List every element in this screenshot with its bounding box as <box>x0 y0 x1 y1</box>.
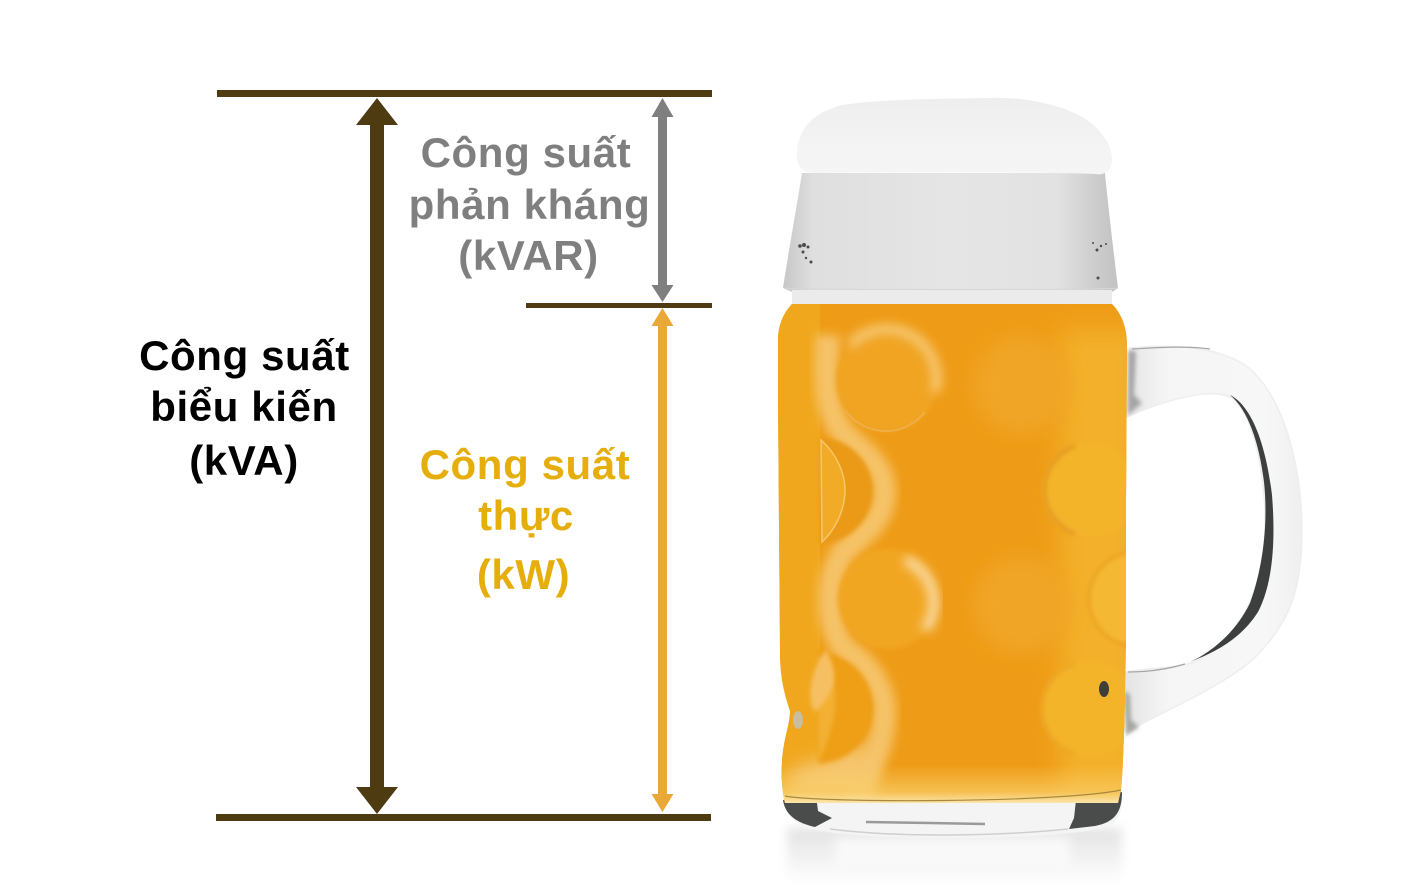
bottom horizontal line <box>216 814 711 821</box>
arrow: apparent power <box>356 98 398 814</box>
illustration: beer mug <box>770 98 1302 884</box>
base reflection <box>787 828 1122 884</box>
label: apparent power: (kVA) <box>189 437 299 484</box>
dimple: far right <box>1118 557 1126 641</box>
dimple: middle left half <box>820 438 873 543</box>
label: reactive power: phản kháng <box>409 181 650 228</box>
mug base <box>783 792 1122 838</box>
beer body <box>778 304 1127 803</box>
label: reactive power: (kVAR) <box>458 232 599 279</box>
bottom liquid glow <box>782 768 1122 803</box>
label: apparent power <box>139 332 350 484</box>
label: reactive power: Công suất <box>421 129 631 176</box>
dimple: right middle <box>1042 446 1126 534</box>
middle horizontal line <box>526 303 712 308</box>
ghost dimples <box>974 338 1058 652</box>
liquid bottom edge <box>785 790 1121 801</box>
top horizontal line <box>217 90 712 97</box>
arrow: real power <box>652 308 674 812</box>
label: apparent power: Công suất <box>139 332 350 379</box>
dimple: upper left <box>833 338 934 430</box>
label: apparent power: biểu kiến <box>150 383 338 430</box>
mug handle <box>1124 346 1302 735</box>
glass ridge highlight <box>827 335 884 810</box>
arrow: reactive power <box>652 98 674 302</box>
foam head <box>797 98 1112 174</box>
dimple: lower left <box>835 550 925 648</box>
dimple: right lower <box>1039 670 1126 748</box>
label: real power: thực <box>478 492 574 539</box>
label: reactive power <box>409 129 650 279</box>
label: real power: (kW) <box>477 551 570 598</box>
label: real power <box>420 441 630 598</box>
label: real power: Công suất <box>420 441 630 488</box>
foam collar <box>783 173 1118 304</box>
lower left pale zone <box>790 740 875 800</box>
bubbles on lower handle joint <box>793 681 1109 729</box>
dimple: bottom left half <box>810 650 873 763</box>
